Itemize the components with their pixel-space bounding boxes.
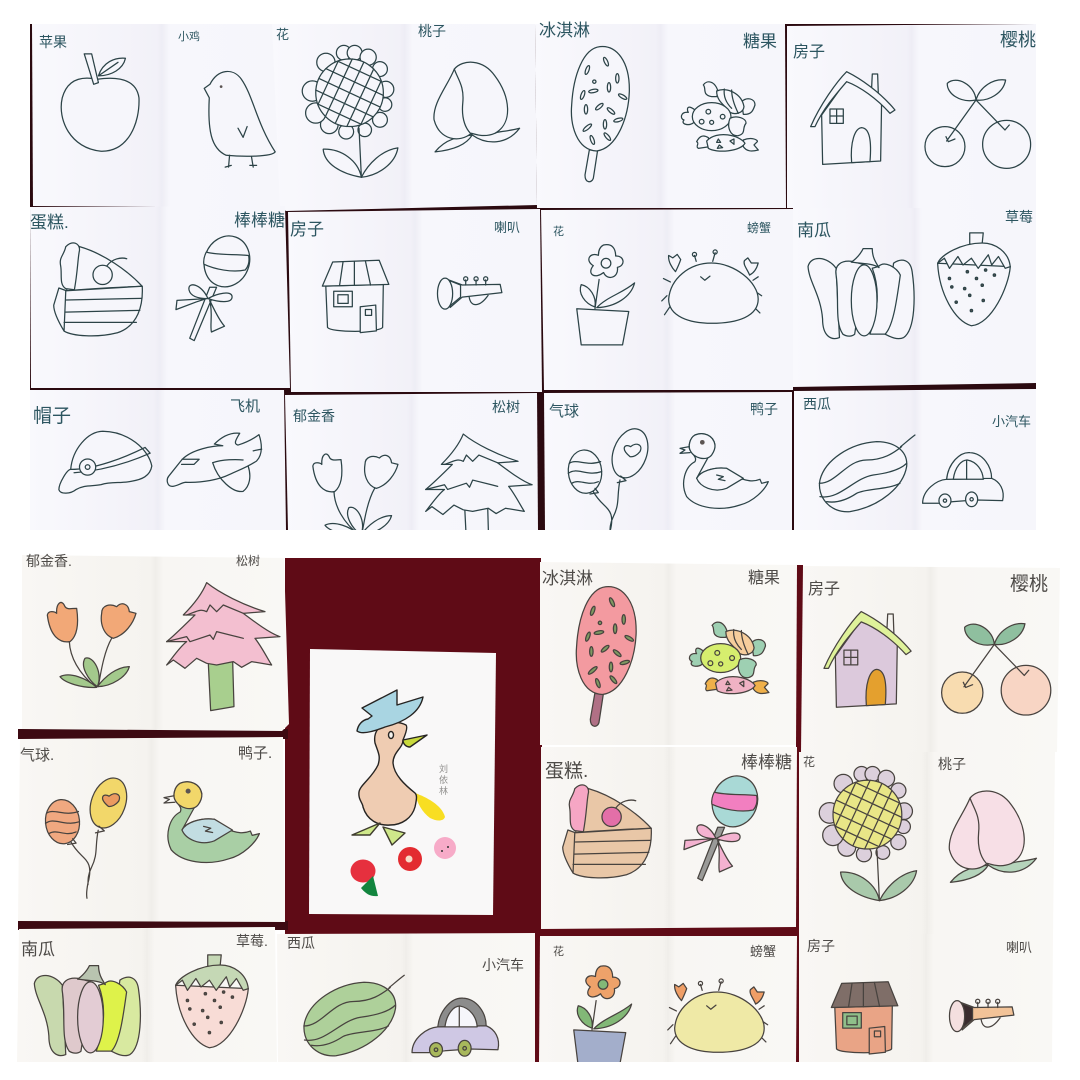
artist name: 刘 bbox=[439, 763, 448, 774]
sheet labels: 房子 bbox=[793, 43, 825, 61]
icon: candy bbox=[681, 82, 758, 151]
centre artwork: duck with hat and clay bbox=[350, 690, 456, 896]
coloured sheets bbox=[17, 555, 1060, 1062]
clay: red flower bbox=[398, 847, 422, 871]
sheet labels: 鸭子 bbox=[750, 401, 778, 417]
icon: duck body bbox=[359, 722, 416, 825]
sheet labels bbox=[30, 21, 1036, 429]
icon: cherries bbox=[925, 80, 1031, 168]
sheet labels: 房子 bbox=[290, 220, 324, 239]
icon: sunflower bbox=[302, 45, 398, 177]
sheet labels: 樱桃 bbox=[1000, 30, 1036, 50]
bottom photo: coloured drawings bbox=[17, 553, 1060, 1066]
icon: apple bbox=[61, 54, 139, 151]
clay: pink pig bbox=[434, 837, 456, 859]
sheet labels: 南瓜 bbox=[21, 940, 55, 959]
sheet labels: 西瓜 bbox=[287, 935, 315, 951]
artist name: 林 bbox=[439, 785, 448, 796]
sheet labels: 小鸡 bbox=[178, 29, 200, 43]
sheet labels: 桃子 bbox=[938, 756, 966, 772]
icon: pumpkin bbox=[808, 249, 914, 339]
icon: small house bbox=[322, 260, 389, 333]
top photo: line drawings bbox=[30, 21, 1036, 554]
icon: hat bbox=[59, 431, 152, 493]
sheet labels: 冰淇淋 bbox=[539, 21, 590, 40]
sheet labels: 蛋糕. bbox=[30, 213, 69, 232]
sheet labels: 帽子 bbox=[33, 405, 71, 427]
icon: trumpet coloured bbox=[949, 999, 1014, 1032]
sheet labels: 房子 bbox=[807, 938, 835, 954]
icon: duck tail bbox=[415, 793, 445, 820]
icon: house coloured bbox=[824, 612, 911, 707]
sheet labels: 郁金香. bbox=[26, 553, 72, 569]
sheet labels: 南瓜 bbox=[797, 221, 831, 240]
sheet labels: 樱桃 bbox=[1010, 573, 1048, 595]
dark backdrop bbox=[30, 24, 1036, 530]
sheet labels: 花 bbox=[803, 754, 815, 769]
icon: duck feet bbox=[352, 823, 405, 845]
sheet labels: 鸭子. bbox=[238, 745, 272, 762]
icon: ice cream bbox=[571, 47, 629, 182]
icon: potted flower bbox=[577, 245, 635, 345]
sheet labels: 郁金香 bbox=[293, 408, 335, 424]
icon: duck coloured bbox=[164, 782, 259, 862]
sheet labels: 糖果 bbox=[743, 32, 777, 51]
sheet labels: 松树 bbox=[492, 399, 520, 415]
sheet labels: 苹果 bbox=[39, 34, 67, 50]
sheet labels: 喇叭 bbox=[1006, 940, 1032, 955]
icon: hat bbox=[357, 690, 423, 733]
icon: ice cream coloured bbox=[576, 587, 636, 726]
sheet labels: 糖果 bbox=[748, 569, 780, 587]
icon: car coloured bbox=[412, 998, 499, 1057]
icon: watermelon coloured bbox=[304, 975, 404, 1056]
sheet labels: 冰淇淋 bbox=[542, 569, 593, 588]
icon: peach bbox=[434, 62, 520, 152]
icon: lollipop bbox=[176, 229, 257, 341]
icon: balloons bbox=[567, 424, 654, 547]
sheet labels: 气球. bbox=[20, 747, 54, 764]
sheet labels: 松树 bbox=[236, 553, 260, 568]
icon: tulips bbox=[313, 454, 398, 536]
icon: pine coloured bbox=[167, 583, 280, 711]
maroon tablecloth bbox=[18, 558, 803, 1062]
icon: duck bbox=[680, 434, 768, 508]
icon: airplane bbox=[167, 433, 262, 492]
icon: pine tree bbox=[426, 434, 532, 554]
icon: cherries coloured bbox=[942, 624, 1051, 715]
sheet labels: 蛋糕. bbox=[545, 760, 588, 782]
icon: chick bbox=[204, 71, 275, 167]
sheet labels: 喇叭 bbox=[494, 220, 520, 235]
icon: beak bbox=[403, 735, 427, 747]
clay: red rose and leaf bbox=[350, 860, 378, 896]
icon: potted flower coloured bbox=[574, 966, 632, 1066]
sheet labels: 棒棒糖 bbox=[234, 211, 285, 230]
sheet labels: 螃蟹 bbox=[747, 220, 771, 235]
icon: balloons coloured bbox=[44, 773, 133, 898]
sheet labels: 气球 bbox=[549, 403, 579, 420]
icon: car bbox=[923, 453, 1003, 507]
sheet labels: 花 bbox=[276, 27, 289, 42]
icon: tulips coloured bbox=[47, 602, 136, 687]
icon: eye bbox=[388, 732, 394, 738]
sheet labels: 房子 bbox=[808, 580, 840, 598]
sheet labels: 螃蟹 bbox=[750, 944, 776, 959]
icon: peach coloured bbox=[949, 791, 1036, 882]
panel: centre sheet bbox=[309, 649, 496, 915]
icon: strawberry bbox=[938, 233, 1010, 326]
sheet labels: 飞机 bbox=[230, 398, 260, 415]
sheet labels: 西瓜 bbox=[803, 396, 831, 412]
icon: candy coloured bbox=[689, 622, 769, 694]
icon: sunflower coloured bbox=[819, 766, 917, 901]
sheet labels: 花 bbox=[553, 225, 564, 238]
sheet labels: 花 bbox=[553, 945, 564, 958]
icon: pumpkin coloured bbox=[34, 966, 140, 1056]
sheet labels bbox=[20, 553, 1048, 973]
icon: small house coloured bbox=[831, 982, 898, 1054]
artist name bbox=[439, 763, 448, 796]
artist name: 依 bbox=[439, 774, 448, 785]
icon: crab bbox=[662, 250, 762, 323]
icon: trumpet bbox=[437, 277, 502, 309]
icon: house bbox=[811, 72, 895, 164]
sheet labels: 草莓 bbox=[1005, 209, 1033, 225]
icon: strawberry coloured bbox=[176, 955, 248, 1048]
sheet labels: 小汽车 bbox=[992, 414, 1031, 429]
sheets bbox=[30, 24, 1036, 530]
icon: lollipop coloured bbox=[684, 769, 765, 881]
icon: cake bbox=[54, 243, 142, 336]
sheet labels: 桃子 bbox=[418, 23, 446, 39]
sheet labels: 棒棒糖 bbox=[741, 753, 792, 772]
icon: watermelon bbox=[819, 435, 915, 512]
icon: cake coloured bbox=[563, 785, 651, 878]
sheet labels: 小汽车 bbox=[482, 957, 524, 973]
sheet labels: 草莓. bbox=[236, 933, 268, 949]
icon: crab coloured bbox=[668, 979, 768, 1052]
